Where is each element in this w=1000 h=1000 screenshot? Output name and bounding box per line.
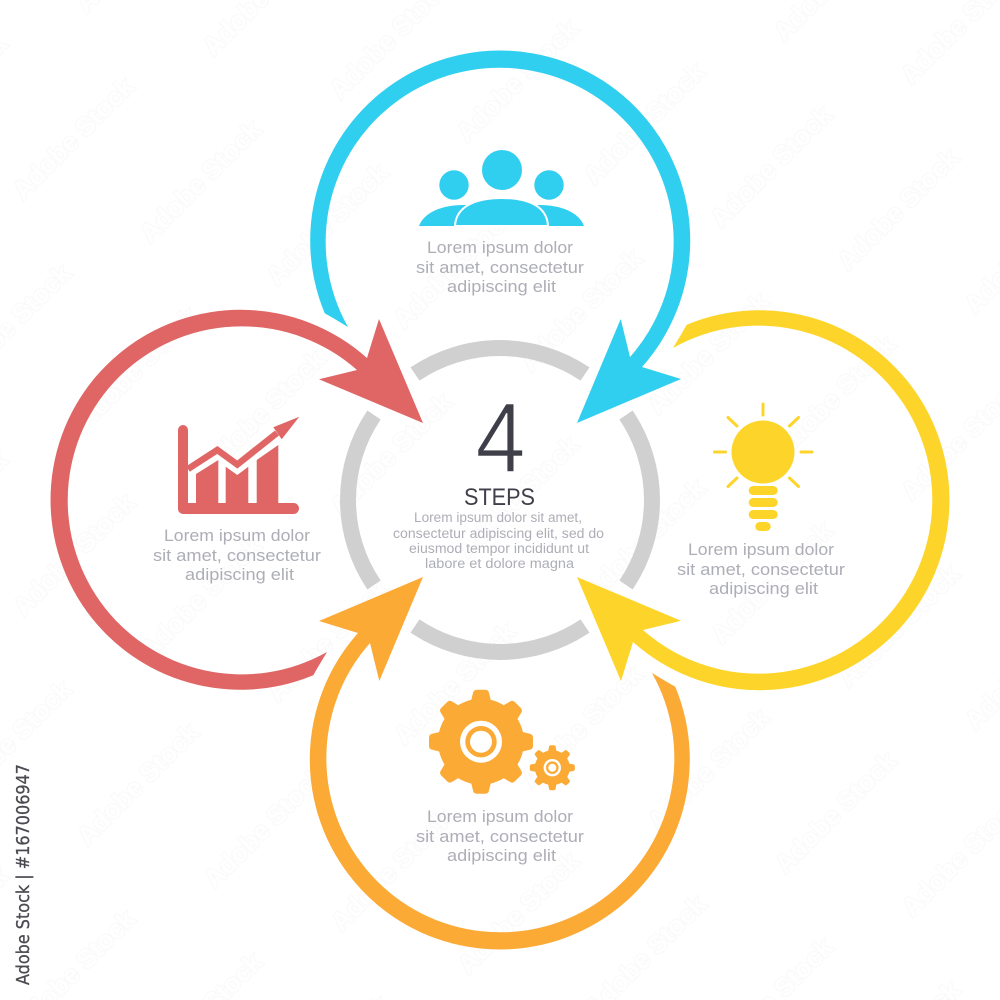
center ring: gray segments: [348, 348, 652, 652]
text: center description: Lorem ipsum dolor sit amet,: [414, 510, 582, 525]
text: blue step: [416, 238, 584, 296]
text: yellow step: [677, 540, 845, 598]
heading: STEPS: STEPS: [464, 484, 535, 511]
text: red step: sit amet, consectetur: [153, 546, 321, 565]
text: center description: eiusmod tempor incididunt ut: [409, 541, 589, 556]
text: orange step: sit amet, consectetur: [416, 827, 584, 846]
icon: growth chart: [178, 417, 299, 514]
text: orange step: adipiscing elit: [447, 846, 556, 865]
text: center description: consectetur adipiscing elit, sed do: [393, 526, 604, 541]
text: orange step: Lorem ipsum dolor: [427, 807, 573, 826]
text: yellow step: sit amet, consectetur: [677, 560, 845, 579]
yellow circular arrow: [577, 310, 949, 690]
text: center description: [393, 510, 604, 571]
icon: large gear: [429, 690, 533, 794]
text: blue step: sit amet, consectetur: [416, 258, 584, 277]
text: red step: Lorem ipsum dolor: [164, 526, 310, 545]
text: center description: labore et dolore magna: [425, 556, 575, 571]
text: blue step: Lorem ipsum dolor: [427, 238, 573, 257]
text: orange step: [416, 807, 584, 865]
text: yellow step: adipiscing elit: [709, 579, 818, 598]
icon: team of people: [419, 150, 584, 226]
orange circular arrow: [310, 577, 690, 949]
blue circular arrow: [310, 51, 690, 423]
text: blue step: adipiscing elit: [447, 277, 556, 296]
icon: light bulb: [714, 404, 812, 531]
center number 4: 4: [476, 382, 526, 493]
red circular arrow: [51, 310, 423, 690]
icon: small gear: [530, 745, 575, 790]
text: red step: [153, 526, 321, 584]
text: yellow step: Lorem ipsum dolor: [688, 540, 834, 559]
stock credit: Adobe Stock | #167006947: [13, 764, 34, 985]
text: red step: adipiscing elit: [185, 565, 294, 584]
